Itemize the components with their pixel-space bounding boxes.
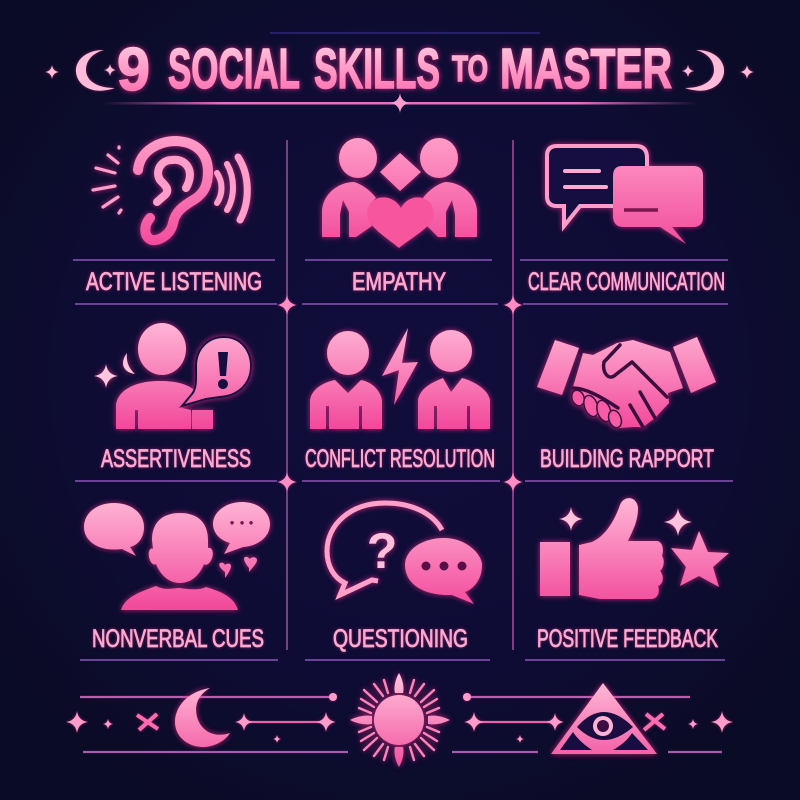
icon: active listening ear [93, 141, 247, 240]
title: SKILLS [314, 37, 440, 101]
bottom ornament band [66, 673, 733, 767]
icon: all-seeing eye triangle [551, 683, 657, 754]
label: ACTIVE LISTENING [86, 268, 262, 296]
icon: conflict resolution two people and bolt [310, 328, 490, 429]
icon: clear communication bubbles [547, 146, 703, 244]
label: BUILDING RAPPORT [540, 445, 714, 473]
icon: questioning bubbles: ? [367, 523, 397, 579]
icon: assertiveness person with exclamation bubble [94, 323, 251, 429]
icon: sun [350, 673, 450, 767]
label: POSITIVE FEEDBACK [537, 625, 718, 653]
label: CONFLICT RESOLUTION [305, 445, 495, 473]
title [117, 36, 672, 103]
icon: handshake [537, 337, 716, 430]
title: MASTER [500, 37, 672, 101]
stars and marks [66, 693, 733, 743]
icon: nonverbal cues person with speech bubbles [84, 502, 270, 610]
title rules [100, 32, 700, 113]
icon: positive feedback thumbs up and star [540, 498, 729, 599]
grid lines [73, 140, 733, 660]
title: 9 [117, 36, 150, 103]
label: NONVERBAL CUES [92, 625, 264, 653]
icon: crescent moon [175, 688, 230, 747]
grid diamonds [277, 295, 523, 492]
icon: empathy people and heart [322, 138, 477, 248]
title: SOCIAL [168, 37, 300, 101]
title ornaments: moons and stars [45, 50, 754, 91]
label: ASSERTIVENESS [101, 445, 251, 473]
label: EMPATHY [352, 268, 446, 296]
title: TO [452, 48, 488, 89]
label: QUESTIONING [333, 625, 468, 653]
icon: questioning bubbles [327, 503, 482, 604]
